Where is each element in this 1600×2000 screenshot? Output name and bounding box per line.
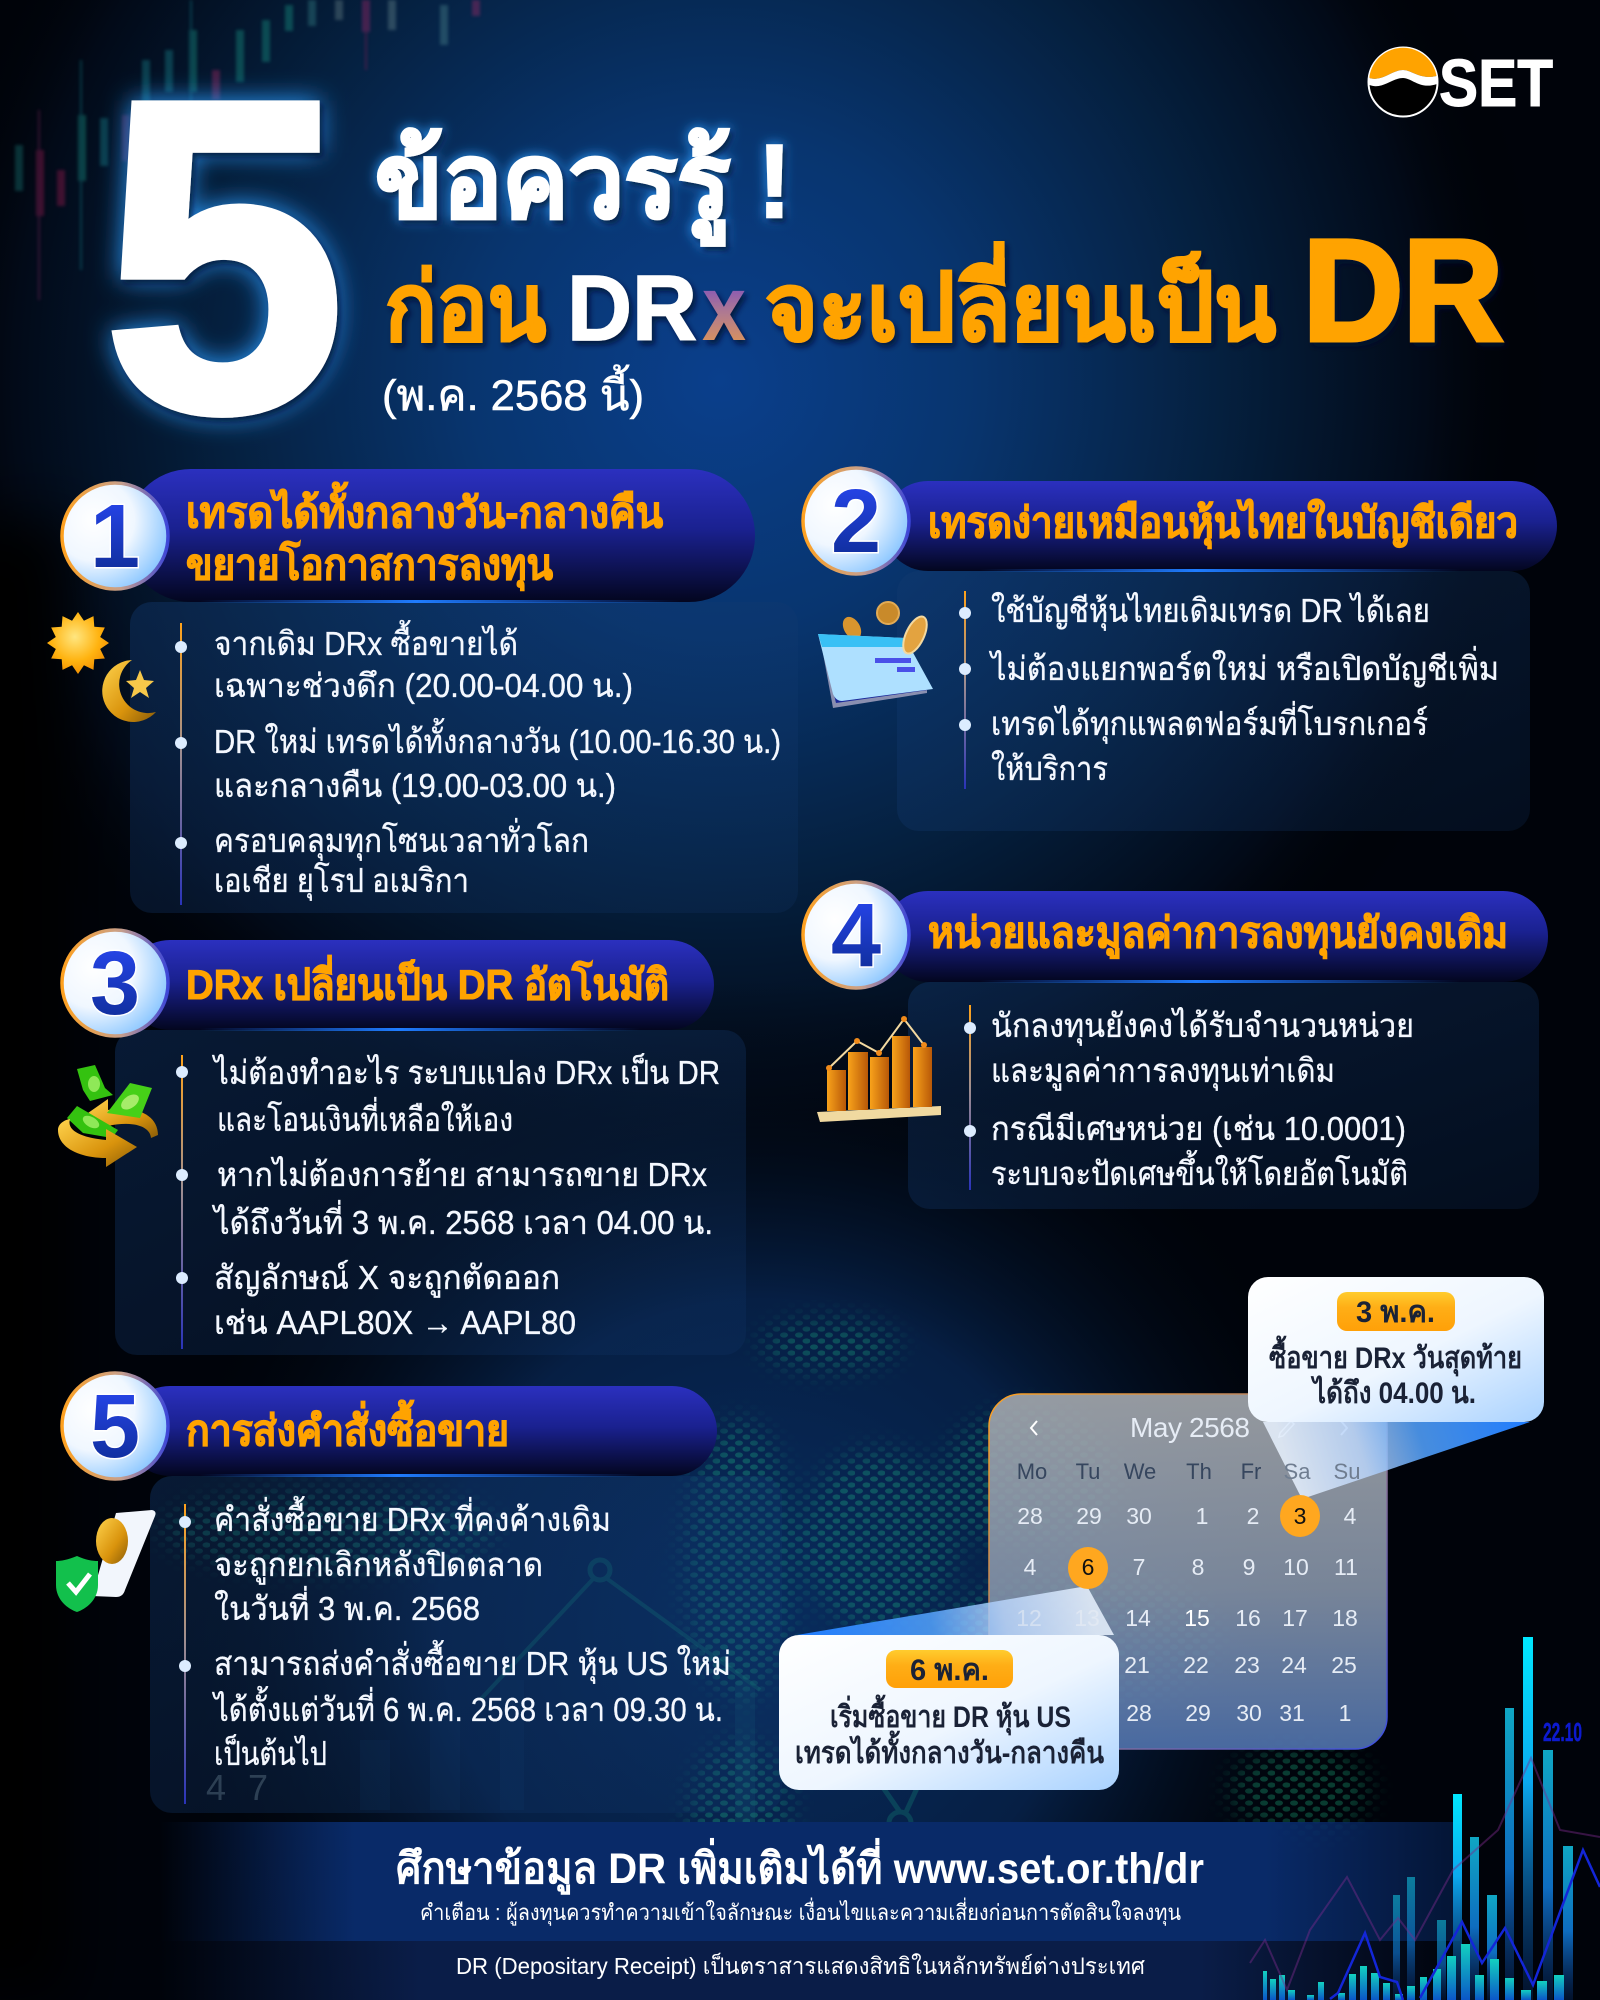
calendar weekdays: Mo [1017, 1459, 1047, 1484]
calendar dates: 14 [1125, 1605, 1151, 1631]
panel 3 body [115, 1030, 746, 1355]
calendar weekdays: Su [1334, 1459, 1360, 1484]
calendar dates: 28 [1126, 1700, 1152, 1726]
calendar dates: 15 [1184, 1605, 1210, 1631]
footer text [396, 1838, 1204, 1979]
calendar dates: 7 [1133, 1554, 1145, 1580]
calendar dates: 29 [1076, 1503, 1102, 1529]
callout text: 6 May: เริ่มซื้อขาย DR หุ้น US [830, 1694, 1071, 1736]
chart: neon bars bottom right [1250, 1637, 1600, 2000]
calendar dates: 11 [1334, 1554, 1358, 1580]
calendar [797, 1394, 1530, 1749]
panel 3 timeline [176, 1055, 188, 1349]
panel 5 number badge: 5 [90, 1377, 140, 1477]
callout badge: 6 May [886, 1650, 1013, 1688]
SET logo [1368, 46, 1553, 121]
calendar dates: 25 [1331, 1652, 1357, 1678]
panel 3 heading: DRx เปลี่ยนเป็น DR อัตโนมัติ [186, 955, 669, 1008]
panel 1 text [214, 620, 781, 901]
panel 4 text: ระบบจะปัดเศษขึ้นให้โดยอัตโนมัติ [991, 1150, 1408, 1192]
panel 1 heading: ขยายโอกาสการลงทุน [186, 540, 553, 591]
panel 3 text: ได้ถึงวันที่ 3 พ.ค. 2568 เวลา 04.00 น. [211, 1200, 713, 1241]
calendar dates: 28 [1017, 1503, 1043, 1529]
background bars and line [360, 1560, 930, 1834]
callout text: 3 May: ได้ถึง 04.00 น. [1310, 1375, 1476, 1410]
panel 5 text: ได้ตั้งแต่วันที่ 6 พ.ค. 2568 เวลา 09.30 น. [211, 1686, 723, 1728]
icon: sun and moon [47, 612, 156, 722]
title: line 1: ข้อควรรู้ ! [375, 124, 791, 246]
title: big number 5: 5 [102, 8, 346, 505]
title: line 2 [385, 210, 1503, 371]
calendar dates: 31 [1279, 1700, 1305, 1726]
panel 2 text: ใช้บัญชีหุ้นไทยเดิมเทรด DR ได้เลย [991, 592, 1430, 631]
panel 4 text: นักลงทุนยังคงได้รับจำนวนหน่วย [991, 1007, 1414, 1046]
panel 1 text: เฉพาะช่วงดึก (20.00-04.00 น.) [214, 667, 633, 704]
callout: 3 May [1248, 1277, 1544, 1422]
callout text: 6 May: เทรดได้ทั้งกลางวัน-กลางคืน [795, 1730, 1104, 1770]
calendar dates: 30 [1236, 1700, 1262, 1726]
title: date: (พ.ค. 2568 นี้) [382, 364, 644, 420]
panel 2 text: ไม่ต้องแยกพอร์ตใหม่ หรือเปิดบัญชีเพิ่ม [988, 646, 1499, 687]
title: big number 5: 5 [102, 8, 346, 505]
footer definition: DR (Depositary Receipt) เป็นตราสารแสดงสิทธิในหลักทรัพย์ต่างประเทศ [456, 1951, 1145, 1979]
title: line 2: x [702, 256, 746, 360]
panel 1 header pill [125, 469, 755, 602]
panel 5 heading: การส่งคำสั่งซื้อขาย [186, 1399, 509, 1454]
panel 1 heading [186, 481, 663, 591]
calendar dates: 9 [1243, 1554, 1255, 1580]
panel 5 text: คำสั่งซื้อขาย DRx ที่คงค้างเดิม [214, 1496, 611, 1538]
calendar dates: 12 [1016, 1605, 1042, 1631]
panel 1 text: DR ใหม่ เทรดได้ทั้งกลางวัน (10.00-16.30 น.) [214, 718, 781, 760]
icon: account book with coins [818, 602, 933, 708]
calendar dates: 24 [1281, 1652, 1307, 1678]
calendar weekdays [1017, 1459, 1360, 1484]
calendar dates: 4 [1024, 1554, 1037, 1580]
panel 5 text: จะถูกยกเลิกหลังปิดตลาด [214, 1546, 543, 1585]
calendar weekdays: Fr [1241, 1459, 1261, 1484]
calendar dates: 23 [1234, 1652, 1260, 1678]
panel 1 number badge: 1 [90, 487, 140, 587]
panel 3 number badge [62, 930, 168, 1036]
callout badge: 3 May: 3 พ.ค. [1356, 1296, 1435, 1329]
dotted world map [157, 1309, 1380, 1822]
panel 2 body [897, 571, 1530, 831]
panel 1 text: จากเดิม DRx ซื้อขายได้ [214, 620, 518, 662]
calendar dates [1016, 1503, 1358, 1726]
calendar weekdays: Sa [1284, 1459, 1311, 1484]
calendar dates: 10 [1283, 1554, 1309, 1580]
calendar weekdays: Th [1186, 1459, 1212, 1484]
calendar dates: 3 [1294, 1503, 1306, 1529]
panel 2 text: เทรดได้ทุกแพลตฟอร์มที่โบรกเกอร์ [991, 701, 1428, 744]
panel 5 text [211, 1496, 731, 1772]
panel 2 header pill [883, 481, 1557, 571]
title: line 2: จะเปลี่ยนเป็น [765, 241, 1276, 360]
callout badge: 6 May: 6 พ.ค. [910, 1654, 989, 1687]
title: line 2: ก่อน [385, 255, 546, 360]
panel 4 text: กรณีมีเศษหน่วย (เช่น 10.0001) [991, 1110, 1406, 1147]
title: line 2: DR [567, 256, 697, 360]
panel 5 body [150, 1476, 782, 1813]
SET logo: SET [1439, 46, 1553, 121]
panel 4 header pill [883, 891, 1548, 982]
calendar weekdays: Tu [1076, 1459, 1100, 1484]
panel 1 text: และกลางคืน (19.00-03.00 น.) [214, 767, 616, 804]
panel 5 text: เป็นต้นไป [214, 1734, 327, 1772]
panel 4 number badge: 4 [831, 886, 881, 986]
panel 5 number badge [62, 1373, 168, 1479]
panel 4 body [908, 982, 1539, 1209]
calendar header: May 2568 [1130, 1412, 1250, 1443]
panel 1 text: เอเชีย ยุโรป อเมริกา [214, 862, 469, 901]
panel 1 heading: เทรดได้ทั้งกลางวัน-กลางคืน [186, 481, 663, 536]
calendar dates: 2 [1247, 1503, 1259, 1529]
calendar dates: 1 [1196, 1503, 1208, 1529]
panel 1 timeline [175, 623, 187, 905]
icon: orange bar chart [817, 1016, 941, 1122]
title: line 1: ข้อควรรู้ ! [375, 124, 791, 246]
panel 1 text: ครอบคลุมทุกโซนเวลาทั่วโลก [214, 818, 589, 861]
calendar dates: 30 [1126, 1503, 1152, 1529]
calendar header [1031, 1412, 1347, 1443]
panel 2 timeline [959, 591, 971, 789]
calendar dates: 16 [1235, 1605, 1261, 1631]
panel 3 header pill [125, 940, 714, 1030]
calendar card [989, 1394, 1387, 1749]
calendar highlighted dates [1068, 1495, 1320, 1589]
icon: money exchange arrows [58, 1065, 158, 1167]
footer band [160, 1822, 1460, 2000]
calendar dates: 8 [1192, 1554, 1204, 1580]
background digits: 4 7 [206, 1767, 268, 1808]
panel 2 text [988, 592, 1499, 787]
calendar dates: 22 [1183, 1652, 1209, 1678]
panel 1 number badge [62, 483, 168, 589]
panel 4 number badge [803, 882, 909, 988]
panel 5: orders [56, 1373, 782, 1813]
panel 5 header pill [125, 1386, 717, 1476]
footer call to action: ศึกษาข้อมูล DR เพิ่มเติมได้ที่ www.set.or.th/dr [396, 1838, 1204, 1895]
callout badge: 3 May [1337, 1292, 1455, 1331]
calendar dates: 13 [1074, 1605, 1100, 1631]
calendar dates: 1 [1339, 1700, 1351, 1726]
panel 2 number badge [803, 468, 909, 574]
panel 1 body [130, 602, 798, 913]
panel 2: same account [803, 468, 1557, 831]
panel 3 text: สัญลักษณ์ X จะถูกตัดออก [214, 1259, 560, 1298]
panel 3 text: และโอนเงินที่เหลือให้เอง [217, 1097, 513, 1138]
panel 2 text: ให้บริการ [991, 750, 1108, 787]
panel 3: automatic conversion [58, 930, 746, 1355]
panel 2 heading: เทรดง่ายเหมือนหุ้นไทยในบัญชีเดียว [928, 498, 1518, 549]
icon: phone with coin and shield [56, 1510, 156, 1612]
panel 3 text: ไม่ต้องทำอะไร ระบบแปลง DRx เป็น DR [211, 1053, 720, 1091]
calendar dates: 29 [1185, 1700, 1211, 1726]
panel 3 number badge: 3 [90, 934, 140, 1034]
panel 3 text: หากไม่ต้องการย้าย สามารถขาย DRx [217, 1156, 707, 1193]
calendar dates: 18 [1332, 1605, 1358, 1631]
calendar dates: 4 [1344, 1503, 1357, 1529]
callout text: 6 May [795, 1694, 1104, 1770]
panel 5 text: ในวันที่ 3 พ.ค. 2568 [214, 1586, 480, 1627]
callout: 6 May [779, 1635, 1119, 1790]
calendar dates: 6 [1082, 1554, 1094, 1580]
panel 5 text: สามารถส่งคำสั่งซื้อขาย DR หุ้น US ใหม่ [214, 1640, 731, 1684]
panel 4 text [991, 1007, 1414, 1192]
panel 1: trade day and night [47, 469, 798, 913]
beams from dates to callouts [797, 1422, 1530, 1635]
footer warning: คำเตือน : ผู้ลงทุนควรทำความเข้าใจลักษณะ เงื่อนไขและความเสี่ยงก่อนการตัดสินใจลงทุน [420, 1897, 1181, 1926]
panel 4 heading: หน่วยและมูลค่าการลงทุนยังคงเดิม [928, 909, 1508, 959]
panel 2 number badge: 2 [831, 472, 881, 572]
calendar dates: 17 [1282, 1605, 1308, 1631]
calendar dates: 21 [1124, 1652, 1150, 1678]
panel 4: units unchanged [803, 882, 1548, 1209]
panel 3 text: เช่น AAPL80X → AAPL80 [214, 1304, 576, 1341]
callout text: 3 May [1269, 1335, 1522, 1410]
callout text: 3 May: ซื้อขาย DRx วันสุดท้าย [1269, 1335, 1522, 1377]
panel 4 text: และมูลค่าการลงทุนเท่าเดิม [991, 1052, 1335, 1091]
calendar weekdays: We [1124, 1459, 1156, 1484]
title: line 2: DR [1303, 210, 1503, 371]
panel 4 timeline [964, 1005, 976, 1190]
panel 3 text [211, 1053, 720, 1341]
panel 5 timeline [179, 1504, 191, 1804]
